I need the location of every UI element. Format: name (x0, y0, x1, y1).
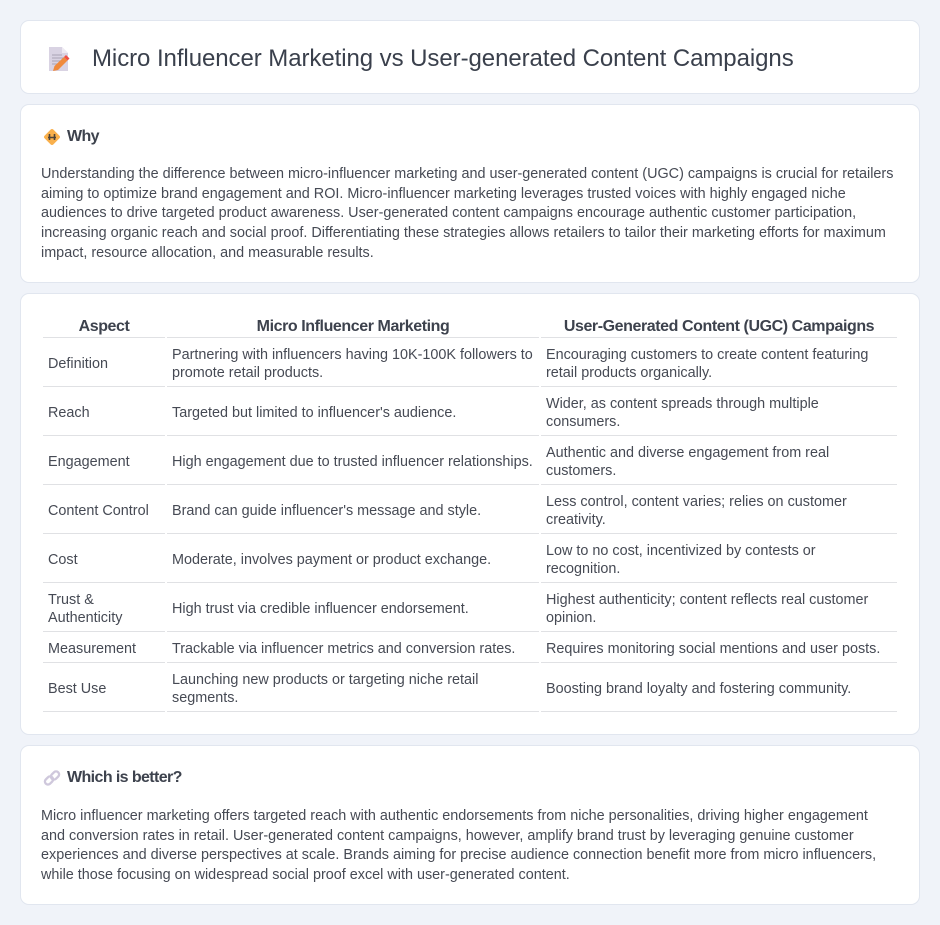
row: engagement: Engagement (48, 454, 130, 470)
table header row: Micro Influencer Marketing (257, 318, 449, 335)
panel: title (20, 20, 920, 94)
row: definition: Definition (48, 356, 108, 372)
row: trust and authenticity: High trust via credible influencer endorsement. (172, 601, 469, 617)
icon: warning diamond (44, 129, 60, 145)
row: definition: retail products organically. (546, 365, 712, 381)
text block: verdict paragraph (41, 808, 876, 883)
text block: verdict paragraph: while those focusing on widespread social proof excel with user-generated content. (41, 867, 570, 883)
heading: page title: Micro Influencer Marketing vs User-generated Content Campaigns (92, 45, 794, 72)
row: cost: Moderate, involves payment or product exchange. (172, 552, 491, 568)
row: trust and authenticity: Trust & (48, 592, 94, 608)
row: best use: Boosting brand loyalty and fostering community. (546, 681, 851, 697)
row: trust and authenticity: Authenticity (48, 610, 122, 626)
row: reach: Reach (48, 405, 90, 421)
row: definition: promote retail products. (172, 365, 323, 381)
text block: why paragraph: impact, resource allocation, and measurable results. (41, 245, 374, 261)
heading: why: Why (67, 128, 99, 145)
row: cost: Cost (48, 552, 78, 568)
panel: which is better (20, 745, 920, 905)
row: engagement: customers. (546, 463, 616, 479)
row: content control: Less control, content varies; relies on customer (546, 494, 847, 510)
row: trust and authenticity: Highest authenticity; content reflects real customer (546, 592, 868, 608)
row: definition: Partnering with influencers having 10K-100K followers to (172, 347, 533, 363)
text block: why paragraph (41, 166, 893, 261)
row: trust and authenticity: opinion. (546, 610, 596, 626)
panel: why (20, 104, 920, 283)
row: engagement (43, 445, 897, 485)
text block: why paragraph: aiming to optimize brand engagement and ROI. Micro-influencer marketing leverages trusted voices with highly engaged niche (41, 186, 846, 202)
row: cost: recognition. (546, 561, 620, 577)
row: best use (43, 672, 897, 712)
row: cost (43, 543, 897, 583)
row: measurement: Measurement (48, 641, 136, 657)
row: measurement (43, 641, 897, 663)
row: definition (43, 347, 897, 387)
row: definition: Encouraging customers to create content featuring (546, 347, 868, 363)
text block: why paragraph: increasing organic reach and social proof. Differentiating these strategies allows retailers to tailor their marketing efforts for maximum (41, 225, 886, 241)
row: reach: Targeted but limited to influencer's audience. (172, 405, 456, 421)
heading: which is better: Which is better? (67, 769, 182, 786)
row: measurement: Requires monitoring social mentions and user posts. (546, 641, 880, 657)
row: engagement: High engagement due to trusted influencer relationships. (172, 454, 533, 470)
text block: verdict paragraph: experiences and diverse perspectives at scale. Brands aiming for precise audience connection benefit more from micro influencers, (41, 847, 876, 863)
row: reach: consumers. (546, 414, 620, 430)
icon: link (44, 770, 60, 786)
table header row: Aspect (79, 318, 129, 335)
row: reach: Wider, as content spreads through multiple (546, 396, 819, 412)
row: content control: Content Control (48, 503, 149, 519)
text block: verdict paragraph: Micro influencer marketing offers targeted reach with authentic endorsements from niche personalities, driving higher engagement (41, 808, 868, 824)
text block: why paragraph: Understanding the difference between micro-influencer marketing and user-generated content (UGC) campaigns is crucial for retailers (41, 166, 893, 182)
row: content control: creativity. (546, 512, 606, 528)
icon: document with pencil (49, 47, 70, 71)
text block: why paragraph: audiences to drive targeted product awareness. User-generated content campaigns encourage authentic customer participation, (41, 205, 856, 221)
row: trust and authenticity (43, 592, 897, 632)
row: content control (43, 494, 897, 534)
table header row (43, 318, 897, 338)
panel: comparison table (20, 293, 920, 735)
row: reach (43, 396, 897, 436)
row: best use: Best Use (48, 681, 106, 697)
row: cost: Low to no cost, incentivized by contests or (546, 543, 816, 559)
text block: verdict paragraph: and conversion rates in retail. User-generated content campaigns, however, amplify brand trust by leveraging genuine customer (41, 828, 854, 844)
row: best use: Launching new products or targeting niche retail (172, 672, 478, 688)
row: measurement: Trackable via influencer metrics and conversion rates. (172, 641, 515, 657)
row: engagement: Authentic and diverse engagement from real (546, 445, 829, 461)
row: best use: segments. (172, 690, 238, 706)
table header row: User-Generated Content (UGC) Campaigns (564, 318, 874, 335)
row: content control: Brand can guide influencer's message and style. (172, 503, 481, 519)
